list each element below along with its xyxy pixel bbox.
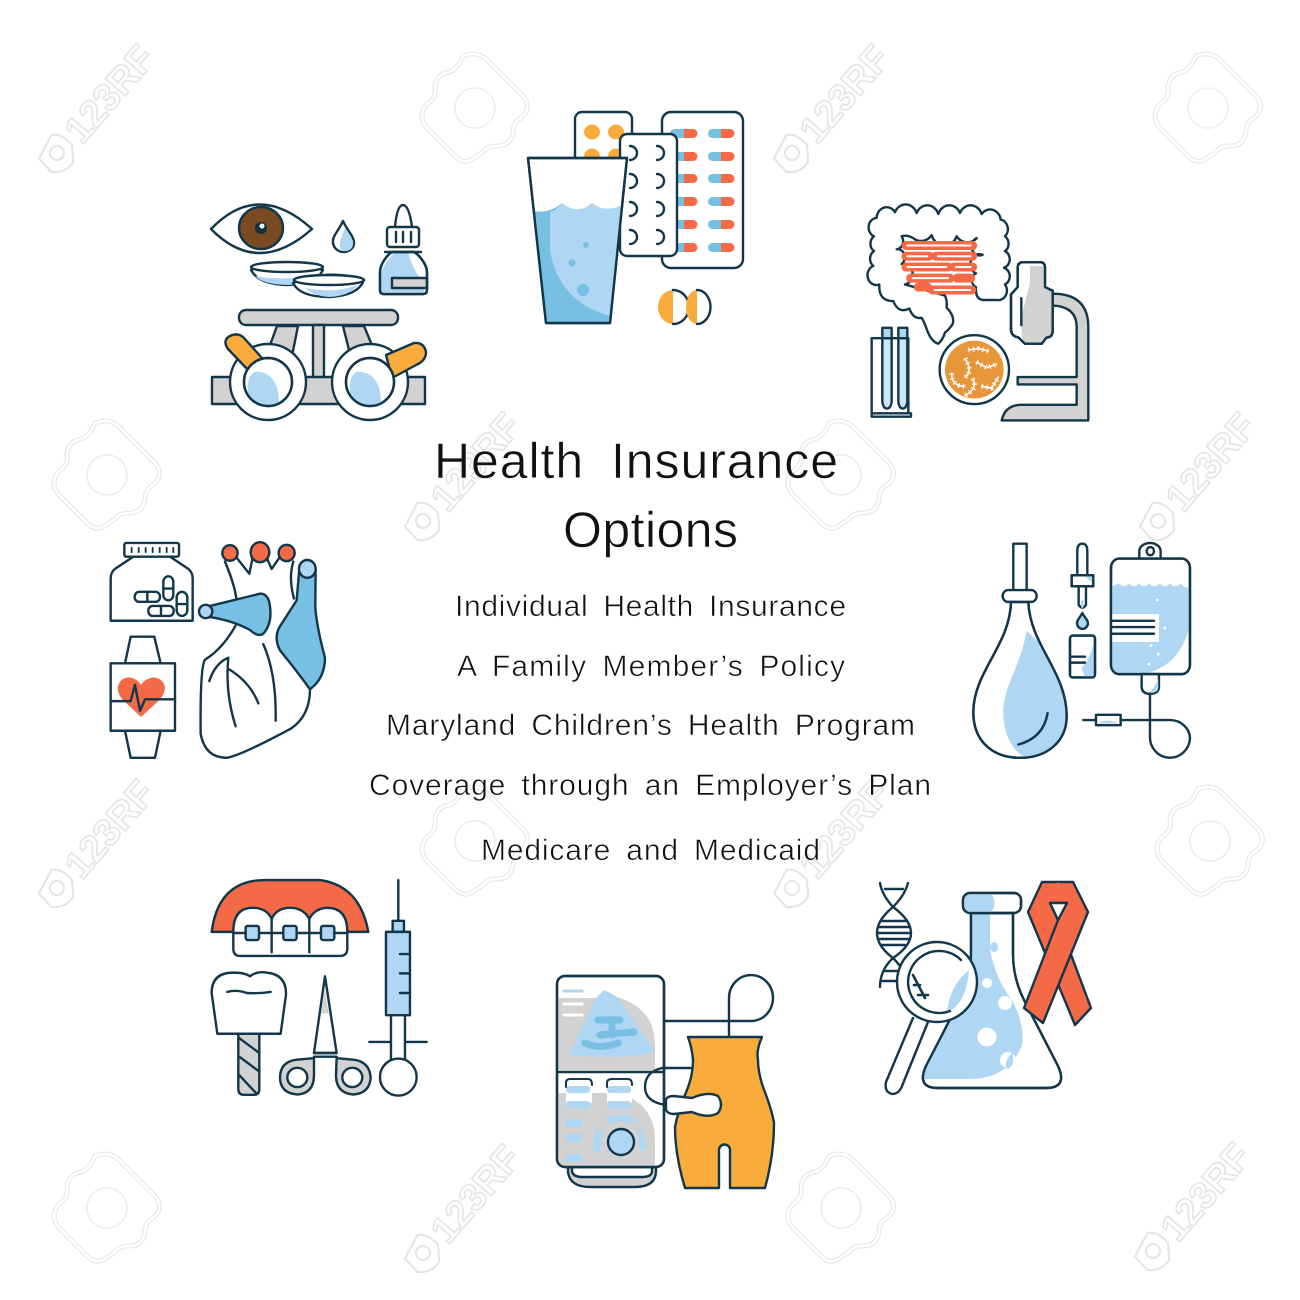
watermark layer: 123RF xyxy=(423,1138,530,1251)
list of insurance options: Coverage through an Employer’s Plan xyxy=(369,769,931,802)
icon group: DNA, flask and ribbon xyxy=(877,882,1091,1094)
watermark layer: 123RF xyxy=(57,38,164,151)
title: Health Insurance xyxy=(434,433,838,489)
icon group: enema bulb, dropper and IV bag xyxy=(973,543,1192,760)
title: Options xyxy=(563,502,738,558)
icon group: eye care xyxy=(211,204,427,420)
watermark layer: 123RF xyxy=(1158,406,1265,519)
watermark layer: 123RF xyxy=(792,38,899,151)
watermark layer: 123RF xyxy=(423,406,530,519)
list of insurance options: Medicare and Medicaid xyxy=(481,834,820,867)
title xyxy=(434,433,838,558)
list of insurance options xyxy=(369,590,931,867)
icon group: heart and medication xyxy=(111,542,325,758)
watermark layer: 123RF xyxy=(57,773,164,886)
list of insurance options: A Family Member’s Policy xyxy=(457,650,845,683)
watermark layer: 123RF xyxy=(792,773,899,886)
list of insurance options: Maryland Children’s Health Program xyxy=(386,709,915,742)
icon group: pills and water xyxy=(520,112,743,330)
list of insurance options: Individual Health Insurance xyxy=(455,590,846,623)
icon group: colon and microscope xyxy=(867,204,1088,420)
icon group: dental tools xyxy=(212,880,427,1096)
watermark layer: 123RF xyxy=(1153,1136,1260,1249)
icon group: ultrasound machine xyxy=(557,975,774,1188)
